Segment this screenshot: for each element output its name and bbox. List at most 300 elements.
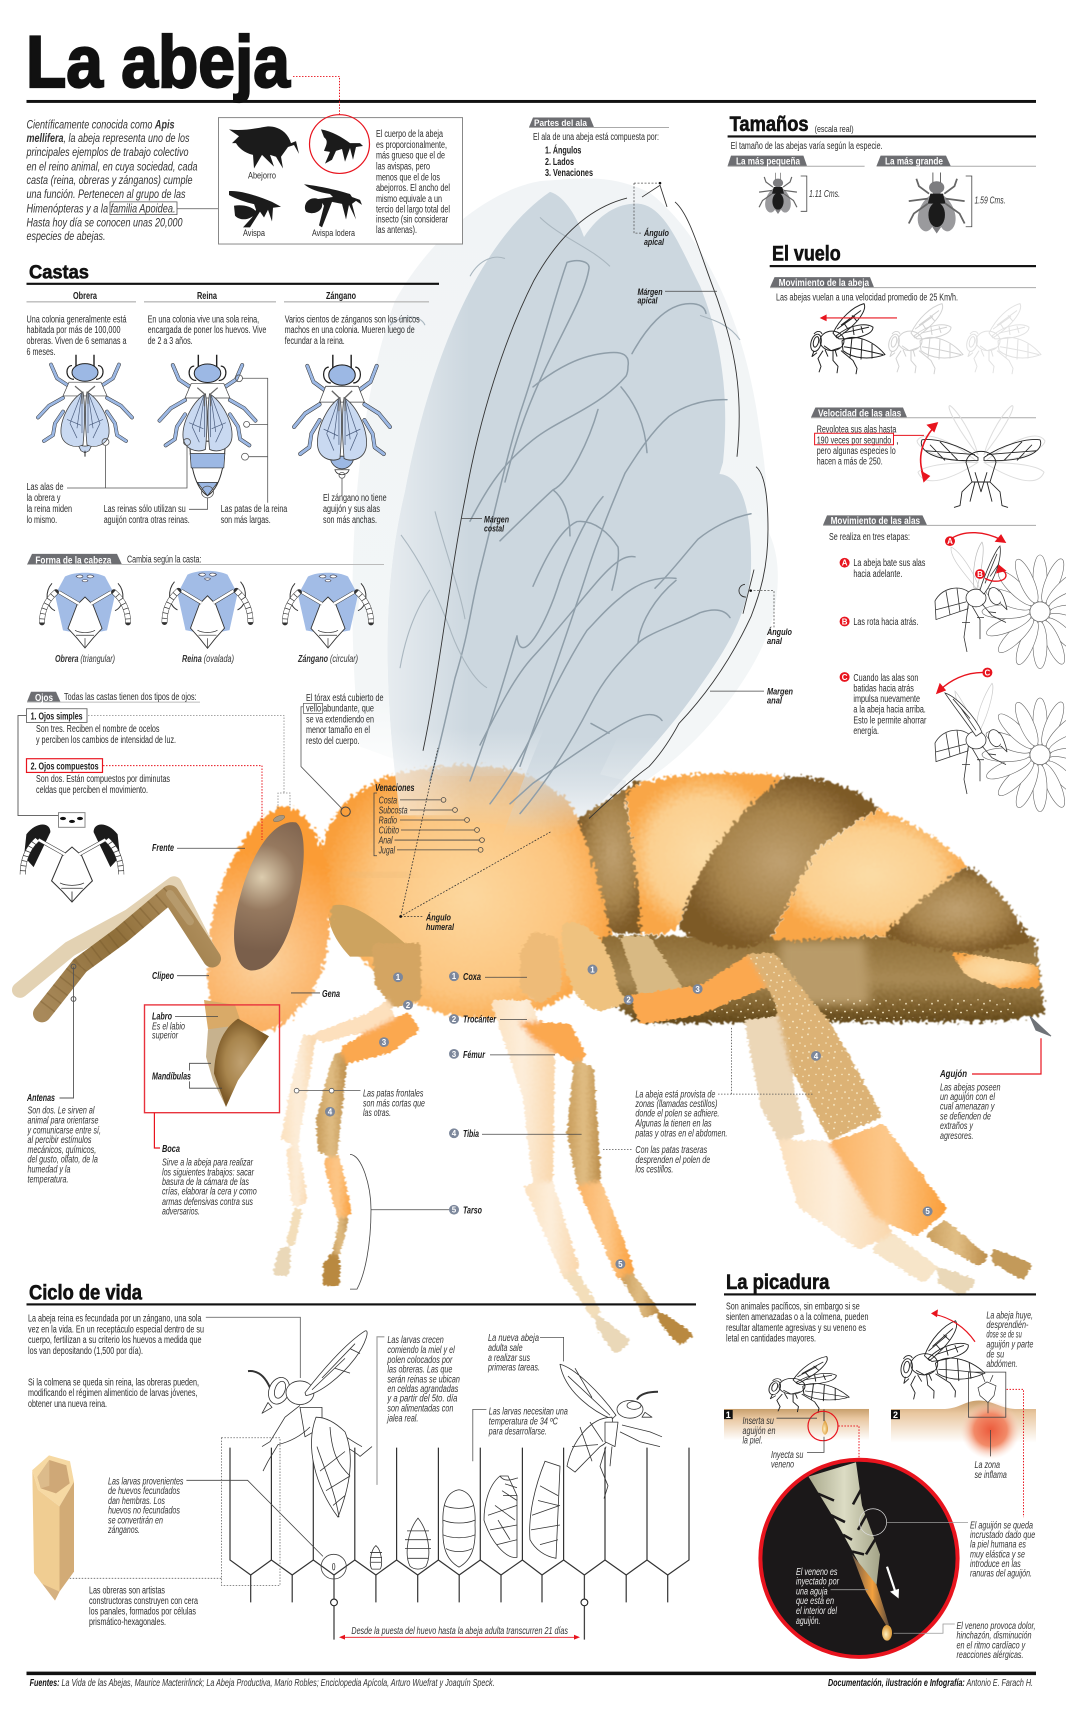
illustration: hind leg — [562, 922, 1033, 1297]
icon: smallest bee — [759, 173, 797, 214]
callout: antenas: humedad y la — [28, 1165, 71, 1175]
note: aguijón incrustado: ranuras del aguijón. — [970, 1569, 1032, 1580]
intro text: mellifera, la abeja representa uno de los — [26, 131, 190, 145]
steps A, B, C: Las rota hacia atrás. — [853, 617, 918, 628]
text: fecundación: Si la colmena se queda sin reina, las obreras pueden, — [28, 1377, 199, 1388]
intro text: Himenópteras y a la familia Apoidea. — [26, 202, 175, 216]
panel: tamaños: La más pequeña — [736, 157, 800, 167]
step 2: inflamed skin and flying bee — [891, 1309, 1036, 1481]
text: picadura intro: sienten amenazadas o a la colmena, pueden — [726, 1312, 869, 1323]
callout: agujón: Las abejas poseen — [940, 1083, 1001, 1093]
head with eyes highlighted — [23, 824, 121, 902]
callout: agujón: Agujón — [939, 1069, 967, 1080]
captions: castas: Las patas de la reina — [221, 504, 288, 515]
captions: castas: Las alas de — [26, 482, 64, 493]
timeline — [331, 1575, 588, 1640]
magnified stinger: El veneno es — [796, 1567, 838, 1578]
panel: partes del ala: 2. Lados — [545, 157, 574, 168]
callout: larvas provenientes — [70, 1438, 346, 1585]
leader lines: castas — [67, 375, 345, 509]
callout: nueva abeja: primeras tareas. — [487, 1363, 540, 1374]
callout: nueva abeja: adulta sale — [488, 1343, 523, 1354]
labels: venaciones: Jugal — [378, 845, 396, 856]
labels: coxa row — [393, 965, 703, 1005]
magnified stinger: una aguja — [796, 1587, 828, 1598]
callout: boca: Es el labio — [152, 1021, 185, 1032]
note: cestillos: La abeja está provista de — [635, 1090, 716, 1100]
callout: boca: basura de la cámara de las — [162, 1177, 249, 1188]
steps A, B, C: hacia adelante. — [853, 569, 902, 580]
callout: larvas crecen: polen colocados por — [387, 1355, 453, 1366]
callout: nueva abeja: Las larvas necesitan una — [489, 1407, 568, 1418]
labels: leg parts: 5 — [452, 1206, 457, 1215]
note: efectos del veneno: El veneno provoca dolor, — [956, 1621, 1035, 1632]
bee: zángano — [294, 355, 390, 475]
callout: nueva abeja: a realizar sus — [488, 1353, 530, 1364]
panel: ojos: Todas las castas tienen dos tipos de ojos: — [64, 692, 197, 703]
labels: wing parts lower — [461, 514, 793, 705]
captions: castas: lo mismo. — [26, 515, 57, 526]
magnified stinger — [760, 1460, 968, 1657]
icon: largest bee — [909, 173, 965, 233]
panel: castas: Obrera — [73, 291, 97, 302]
comparison text: menos que el de los — [376, 172, 440, 183]
panel: ojos: 2. Ojos compuestos — [31, 762, 99, 772]
panel: wing movement stages — [840, 533, 1066, 812]
step 1: skin and bee: Inyecta su — [771, 1450, 804, 1461]
callout: larvas crecen: y a partir del 5to. día — [387, 1394, 458, 1405]
panel: tamaños: El tamaño de las abejas varía según la especie. — [731, 141, 883, 152]
panel: castas: Reina — [197, 291, 217, 302]
note: aguijón incrustado — [970, 1521, 1036, 1580]
labels: head parts: Gena — [322, 989, 340, 1000]
text: picadura intro: Son animales pacíficos, sin embargo si se — [726, 1301, 860, 1312]
bee wing stage A and B — [935, 542, 1007, 652]
labels: leg parts: Trocánter — [463, 1015, 497, 1026]
panel: forma de la cabeza: Cambia según la casta: — [127, 555, 201, 566]
panel: ojos: 1. Ojos simples — [31, 712, 83, 722]
step 1: skin and bee — [724, 1356, 869, 1470]
panel: el vuelo: hacen a más de 250. — [817, 456, 883, 467]
text: fecundación: cuerpo, fertilizan a su criterio los huevos a medida que — [28, 1335, 202, 1346]
comparison text: más grueso que el de — [376, 151, 445, 162]
text: fecundación — [28, 1314, 204, 1410]
note: cestillos — [603, 1026, 814, 1175]
callout: agujón: un aguijón con el — [940, 1092, 996, 1103]
panel: castas: Zángano — [326, 291, 356, 302]
panel: el vuelo: Velocidad de las alas — [818, 408, 902, 419]
callout: agujón: agresores. — [940, 1131, 973, 1142]
text: reina: En una colonia vive una sola reina, — [148, 315, 259, 325]
labels: venaciones: Cúbito — [379, 825, 399, 836]
labels: wing parts upper: Ángulo — [643, 227, 669, 238]
text: reina: encargada de poner los huevos. Vive — [148, 325, 267, 336]
callout: boca: crías, elaborar la cera y como — [162, 1187, 257, 1198]
badge letters — [947, 537, 991, 677]
steps A, B, C: energía. — [853, 726, 879, 737]
text: fecundación: La abeja reina es fecundada por un zángano, una sola — [28, 1314, 202, 1325]
text: obreras artistas — [89, 1585, 198, 1628]
note: vello: El tórax está cubierto de — [306, 693, 384, 704]
note: efectos del veneno: hinchazón, disminución — [956, 1630, 1032, 1641]
note: cestillos: Con las patas traseras — [635, 1145, 707, 1156]
labels: leg parts: 4 — [328, 1108, 333, 1117]
callout: boca: adversarios. — [162, 1207, 200, 1217]
comparison text: tercio del largo total del — [376, 205, 450, 216]
labels: leg parts: 3 — [452, 1050, 457, 1059]
honeycomb cross-section — [230, 1448, 689, 1602]
label: ángulo humeral: humeral — [426, 921, 454, 932]
callout: antenas: animal para orientarse — [28, 1116, 99, 1126]
labels: wing parts upper — [634, 182, 717, 306]
labels: wing parts lower: Márgen — [484, 514, 509, 525]
panel: el vuelo: Movimiento de la abeja — [779, 278, 870, 289]
step 2: inflamed skin and flying bee: desprendién- — [986, 1320, 1029, 1331]
callout: larvas provenientes: de huevos fecundados — [108, 1486, 180, 1497]
labels: wing parts upper: apical — [637, 295, 658, 306]
comparison text: insecto (sin considerar — [376, 215, 449, 225]
icon: wasp silhouette — [229, 191, 281, 227]
panel: castas — [26, 261, 439, 526]
label: ángulo humeral — [399, 748, 552, 932]
panel: forma de la cabeza: Zángano (circular) — [297, 654, 358, 665]
callout: nueva abeja: temperatura de 34 ºC — [489, 1417, 558, 1428]
note: efectos del veneno: en el ritmo cardíaco y — [956, 1640, 1026, 1651]
callout: larvas crecen — [377, 1335, 460, 1485]
labels: Avispa lodera — [312, 228, 355, 238]
prismatic wax cell — [32, 1455, 74, 1600]
callout: larvas crecen: comiendo la miel y el — [387, 1345, 455, 1356]
text: zángano: machos en una colonia. Mueren luego de — [285, 325, 415, 336]
panel: castas: Castas — [29, 261, 89, 283]
panel: el vuelo: Revolotea sus alas hasta — [817, 425, 897, 435]
captions: castas: la reina miden — [26, 504, 72, 515]
head: obrera — [42, 573, 128, 648]
labels: wing parts lower: costal — [484, 522, 504, 533]
comparison text: abejorros. El ancho del — [376, 183, 450, 194]
captions: castas: El zángano no tiene — [323, 493, 387, 504]
panel: ojos — [18, 692, 290, 902]
labels: leg parts: Tibia — [463, 1129, 479, 1140]
note: cestillos: donde el polen se adhiere. — [635, 1109, 719, 1120]
text: picadura intro: resultar altamente agresivas y su veneno es — [726, 1323, 866, 1334]
comparison text: las antenas). — [376, 225, 417, 236]
callout: larvas crecen: Las larvas crecen — [387, 1335, 444, 1346]
callout: agujón — [939, 1038, 1041, 1142]
steps A, B, C: Esto le permite ahorrar — [853, 716, 927, 726]
labels: coxa row: 2 — [626, 996, 631, 1005]
magnified stinger: que está en — [796, 1596, 834, 1607]
magnified stinger: inyectado por — [796, 1577, 840, 1587]
step 2: inflamed skin and flying bee: se inflama — [974, 1470, 1007, 1481]
labels: leg parts: Tarso — [463, 1206, 482, 1217]
callout: boca: Boca — [162, 1144, 180, 1155]
labels: leg parts — [294, 1000, 933, 1289]
note: cestillos: desprenden el polen de — [635, 1155, 711, 1166]
captions: castas — [26, 482, 387, 526]
panel: forma de la cabeza: Obrera (triangular) — [55, 654, 115, 665]
text: reina — [148, 315, 267, 347]
intro text: una función. Pertenecen al grupo de las — [26, 187, 186, 201]
bee: obrera — [38, 355, 132, 457]
panel: la picadura — [724, 1269, 1036, 1661]
step 2: inflamed skin and flying bee: de su — [986, 1350, 1004, 1360]
callout: larvas provenientes: Las larvas provenientes — [108, 1476, 184, 1487]
note: vello: menor tamaño en el — [306, 725, 370, 736]
note: aguijón incrustado: muy elástica y se — [970, 1550, 1025, 1560]
labels: venaciones: Radio — [379, 815, 397, 826]
labels: venaciones: Anal — [378, 836, 393, 846]
icon: bumblebee silhouette — [229, 126, 299, 169]
pollen on hind tibia — [747, 953, 883, 1140]
callout: larvas crecen: jalea real. — [386, 1413, 418, 1424]
steps A, B, C: B — [842, 618, 848, 626]
wing margin lines — [423, 185, 739, 751]
note: efectos del veneno — [956, 1621, 1036, 1661]
panel: el vuelo: El vuelo — [772, 241, 841, 265]
step 1: skin and bee: la piel. — [742, 1436, 763, 1446]
labels: venaciones: Costa — [379, 795, 397, 806]
text: obrera: Una colonia generalmente está — [26, 315, 127, 325]
ocelli box — [58, 813, 85, 827]
callout: larvas crecen: serán reinas se ubican — [387, 1374, 460, 1385]
labels: wing parts upper: Márgen — [637, 286, 663, 297]
callout: boca: Sirve a la abeja para realizar — [162, 1158, 254, 1169]
callout: nueva abeja: La nueva abeja — [488, 1333, 539, 1344]
panel: ojos: Son tres. Reciben el nombre de ocelos — [36, 724, 160, 735]
intro text: principales ejemplos de trabajo colectivo — [26, 145, 189, 159]
text: picadura intro: letal en cantidades mayores. — [726, 1334, 816, 1344]
text: zángano: Varios cientos de zánganos son los únicos — [285, 315, 420, 325]
intro text: en el reino animal, en cuya sociedad, cada — [26, 160, 198, 173]
callout: larvas provenientes: dan hembras. Los — [108, 1496, 165, 1507]
panel: forma de la cabeza: Reina (ovalada) — [182, 654, 234, 665]
steps A, B, C: impulsa nuevamente — [853, 694, 920, 705]
text: fecundación: vez en la vida. En un receptáculo especial dentro de su — [28, 1325, 204, 1335]
captions: castas: aguijón contra otras reinas. — [104, 515, 190, 526]
labels: wing parts lower: Ángulo — [766, 626, 792, 637]
callout: antenas — [26, 964, 101, 1185]
note: aguijón incrustado: El aguijón se queda — [970, 1521, 1033, 1531]
labels: leg parts: 4 — [452, 1129, 457, 1138]
badge letters: A — [947, 537, 953, 546]
labels: leg parts: 5 — [925, 1207, 930, 1216]
intro text — [26, 117, 218, 243]
steps A, B, C: batidas hacia atrás — [853, 684, 914, 695]
captions: castas: aguijón y sus alas — [323, 504, 380, 515]
pupae — [484, 1461, 560, 1558]
text: zángano — [285, 315, 420, 347]
labels: leg parts: 5 — [618, 1260, 623, 1269]
panel: ojos: Ojos — [35, 693, 53, 704]
steps A, B, C — [840, 558, 927, 737]
illustration: abdomen — [577, 773, 1051, 1036]
text: obrera: obreras. Viven de 6 semanas a — [26, 336, 127, 347]
panel: tamaños: Tamaños — [730, 111, 809, 136]
callout: boca: Labro — [152, 1012, 172, 1023]
panel: tamaños: 1.11 Cms. — [809, 189, 840, 200]
text: obreras artistas: constructoras construyen con cera — [89, 1596, 198, 1607]
labels: leg parts: Fémur — [463, 1050, 486, 1061]
labels: head parts: Frente — [152, 843, 174, 854]
title — [26, 21, 1036, 115]
text: obrera: habitada por más de 100,000 — [26, 325, 121, 336]
text: obrera: 6 meses. — [26, 347, 55, 358]
note: aguijón incrustado: introduce en las — [970, 1559, 1021, 1570]
panel: el vuelo: 190 veces por segundo — [817, 435, 892, 446]
panel: tamaños: (escala real) — [815, 124, 854, 134]
step 1: skin and bee: Inserta su — [742, 1416, 774, 1427]
text: obreras artistas: los panales, formados por células — [89, 1607, 196, 1617]
panel: tamaños — [728, 111, 1036, 233]
note: cestillos: patas y otras en el abdomen. — [635, 1128, 727, 1139]
panel: el vuelo: Se realiza en tres etapas: — [829, 532, 910, 543]
labels: venaciones — [374, 783, 484, 856]
panel: forma de la cabeza: Forma de la cabeza — [35, 556, 112, 567]
labels: wing parts lower: anal — [767, 694, 782, 705]
step 1: skin and bee: 1 — [726, 1410, 731, 1420]
illustration: mouthparts — [204, 1000, 269, 1107]
note: vello: vello abundante, que — [306, 704, 374, 715]
note: cestillos: zonas (llamadas cestillos) — [635, 1099, 717, 1110]
step 2: inflamed skin and flying bee: La zona — [974, 1460, 1000, 1471]
callout: agujón: se defienden de — [940, 1112, 991, 1122]
callout: larvas provenientes: zánganos. — [107, 1525, 140, 1536]
note: cestillos: Algunas la tienen en las — [635, 1119, 712, 1129]
arrow: flight direction — [821, 315, 897, 320]
bee: reina — [160, 355, 255, 496]
callout: larvas crecen: en celdas agrandadas — [387, 1384, 458, 1395]
panel: la picadura: La picadura — [726, 1269, 830, 1294]
text: fecundación: obtener una nueva reina. — [28, 1399, 107, 1410]
callout: larvas provenientes: huevos no fecundados — [108, 1506, 180, 1517]
panel: el vuelo — [770, 241, 1045, 543]
labels: coxa row: 3 — [695, 985, 700, 994]
illustration: hind wing — [480, 474, 778, 843]
text: reina: de 2 a 3 años. — [148, 336, 193, 347]
callout: antenas: y comunicarse entre sí, — [27, 1125, 101, 1136]
footer: Documentación, ilustración e Infografía: Antonio E. Farach H. — [828, 1678, 1033, 1689]
note: aguijón incrustado: incrustado dado que — [970, 1530, 1036, 1541]
callout: antenas: temperatura. — [28, 1174, 68, 1185]
panel: el vuelo: pero algunas especies lo — [817, 446, 896, 457]
badge letters: B — [977, 570, 983, 579]
panel: tamaños: 1.59 Cms. — [974, 196, 1005, 207]
illustration: antennae — [20, 884, 212, 1014]
callout: boca: Mandíbulas — [152, 1071, 191, 1082]
callout: agujón: extraños y — [940, 1121, 974, 1132]
panel: partes del ala: Partes del ala — [534, 117, 588, 128]
magnified stinger: aguijón. — [796, 1616, 820, 1627]
panel: ojos: Son dos. Están compuestos por diminutas — [36, 774, 170, 785]
panel: ciclo de vida — [26, 1280, 696, 1640]
callout: antenas: Antenas — [26, 1093, 55, 1104]
panel: partes del ala — [529, 117, 669, 179]
labels: coxa row: 1 — [452, 972, 457, 981]
panel: forma de la cabeza — [27, 554, 384, 665]
note: efectos del veneno: reacciones alérgicas. — [956, 1650, 1023, 1661]
comparison text: mismo equivale a un — [376, 194, 442, 205]
head: reina — [164, 571, 250, 648]
magnified stinger: el interior del — [796, 1606, 838, 1617]
footer — [26, 1672, 1036, 1689]
panel: ojos: y perciben los cambios de intensidad de luz. — [36, 735, 176, 746]
illustration: head and eye — [207, 806, 330, 1031]
illustration: middle legs — [490, 931, 695, 1355]
note: vello: se va extendiendo en — [306, 715, 374, 725]
callout: antenas: mecánicos, químicos, — [28, 1145, 96, 1156]
callout: antenas: del gusto, olfato, de la — [28, 1155, 98, 1166]
panel: partes del ala: 1. Ángulos — [545, 146, 582, 157]
footer: Fuentes: La Vida de las Abejas, Maurice Macterirlinck; La Abeja Productiva, Mario Robles; Enciclopedia Apícola, Arturo Wuefrat y Joaquín Speck. — [30, 1678, 495, 1689]
illustration: thorax — [318, 765, 612, 1018]
labels: wing parts upper: apical — [644, 236, 664, 247]
head: zángano — [285, 573, 371, 648]
step 2: inflamed skin and flying bee: dose se de su — [986, 1330, 1022, 1341]
step 1: skin and bee: veneno — [771, 1460, 794, 1470]
note: vello — [301, 693, 384, 816]
callout: larvas provenientes: se convertirán en — [108, 1516, 163, 1526]
arrows: wing stages — [937, 533, 1006, 693]
step 1: skin and bee: aguijón en — [742, 1426, 776, 1437]
labels: coxa row: 1 — [590, 965, 595, 974]
labels: leg parts: 4 — [814, 1052, 819, 1061]
panel: partes del ala: El ala de una abeja está compuesta por: — [533, 132, 659, 143]
step 2: inflamed skin and flying bee: aguijón y parte — [986, 1340, 1034, 1350]
panel: partes del ala: 3. Venaciones — [545, 168, 593, 179]
text: obreras artistas: Las obreras son artistas — [89, 1585, 165, 1596]
text: picadura intro — [726, 1301, 868, 1344]
callout: boca: los siguientes trabajos: sacar — [162, 1168, 255, 1178]
labels: leg parts: son más cortas que — [363, 1098, 425, 1109]
steps A, B, C: Cuando las alas son — [853, 673, 918, 684]
labels: head parts: Clipeo — [152, 971, 174, 982]
captions: castas: son más anchas. — [323, 515, 377, 526]
labels: coxa row: 1 — [396, 973, 401, 982]
steps A, B, C: a la abeja hacia arriba. — [853, 705, 926, 716]
step 2: inflamed skin and flying bee: La abeja huye, — [986, 1310, 1033, 1321]
callout: boca: armas defensivas contra sus — [162, 1197, 253, 1208]
panel: el vuelo: Las abejas vuelan a una velocidad promedio de 25 Km/h. — [776, 293, 958, 304]
icon: honeybee silhouette — [321, 129, 363, 164]
step 2: inflamed skin and flying bee: abdómen. — [986, 1359, 1017, 1370]
panel: el vuelo: , — [896, 435, 899, 446]
panel: ciclo de vida: Ciclo de vida — [29, 1280, 143, 1304]
icon: mud wasp silhouette — [304, 184, 362, 227]
step 2: inflamed skin and flying bee: 2 — [893, 1410, 898, 1420]
comparison text: El cuerpo de la abeja — [376, 129, 443, 140]
steps A, B, C: C — [842, 673, 848, 682]
panel: el vuelo: Movimiento de las alas — [831, 516, 921, 527]
labels — [243, 170, 355, 238]
labels: Abejorro — [248, 170, 276, 180]
callout: nueva abeja — [473, 1333, 568, 1461]
labels: Avispa — [243, 228, 265, 238]
note: aguijón incrustado: la piel humana es — [970, 1540, 1026, 1551]
title: La abeja — [26, 21, 291, 103]
callout: boca: superior — [152, 1031, 179, 1042]
labels: venaciones: Venaciones — [375, 783, 415, 794]
panel: silhouette comparison — [218, 115, 462, 244]
illustration: front legs — [272, 943, 421, 1286]
comparison text: es proporcionalmente, — [376, 140, 447, 151]
arrow: wing beat — [921, 423, 937, 481]
intro text: casta (reina, obreras y zánganos) cumple — [26, 173, 193, 187]
larvae stages — [370, 1490, 475, 1569]
callout: antenas: al percibir estímulos — [28, 1135, 92, 1146]
labels: venaciones: Subcosta — [379, 805, 408, 816]
captions: castas: son más largas. — [221, 515, 271, 526]
